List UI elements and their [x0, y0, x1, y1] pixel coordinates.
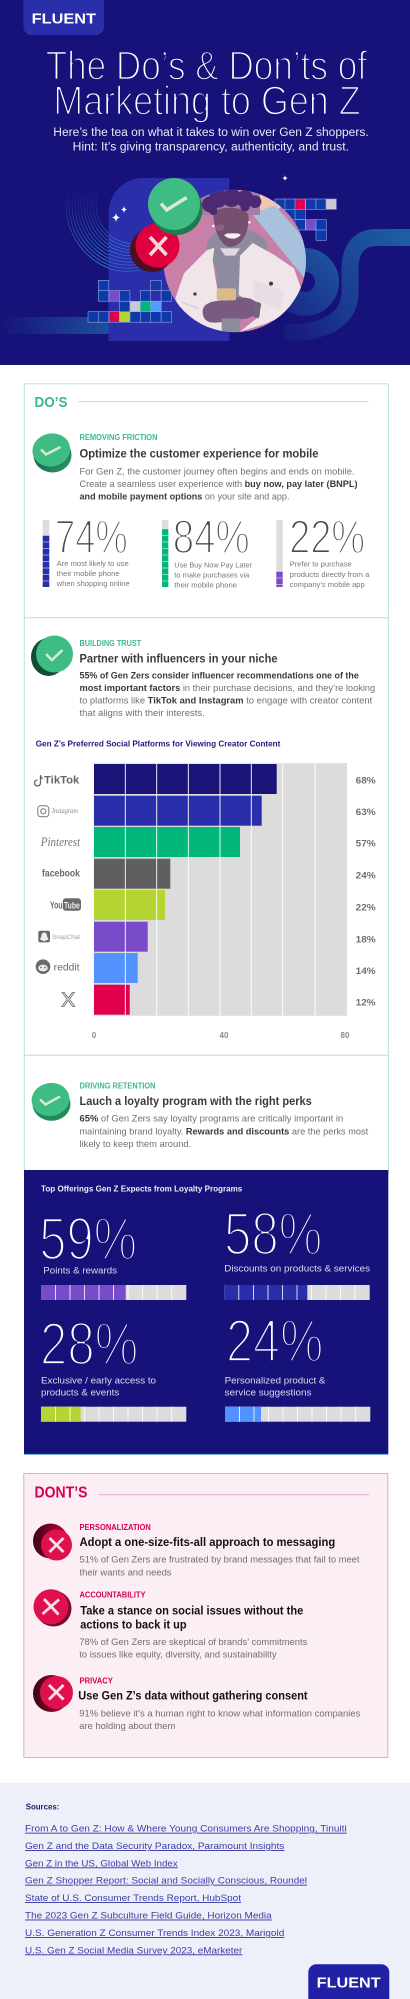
- logo: YouTube: You: [50, 900, 62, 912]
- panel: sources: [0, 1783, 410, 1999]
- item: building trust: Partner with influencers in your niche: [80, 654, 278, 666]
- item: removing friction: Optimize the customer experience for mobile: [80, 449, 318, 461]
- logo: YouTube: Tube: [64, 900, 80, 910]
- stat: 28% exclusive access: products & events: [41, 1387, 120, 1398]
- header background: [0, 0, 410, 365]
- logo: X: X: [61, 990, 75, 1012]
- item: accountability: to issues like equity, diversity, and sustainability: [79, 1649, 277, 1660]
- sources heading: Sources:: [26, 1801, 60, 1811]
- phone: [217, 288, 236, 300]
- stat: 84%: to make purchases via: [174, 571, 250, 580]
- item: driving retention: Lauch a loyalty program with the right perks: [80, 1096, 312, 1108]
- item: driving retention: [29, 1080, 369, 1150]
- hands: [203, 298, 257, 323]
- source links: From A to Gen Z: How & Where Young Consumers Are Shopping, Tinuiti: [25, 1824, 347, 1835]
- jacket right: [239, 243, 301, 332]
- stat: 22%: 22%: [289, 510, 365, 563]
- item: building trust: [31, 636, 375, 719]
- title: [46, 42, 368, 124]
- stat: 28% exclusive access: [40, 1310, 186, 1422]
- value labels: 63%: [356, 807, 376, 818]
- photo: person with phone: [160, 185, 310, 335]
- source links: U.S. Gen Z Social Media Survey 2023, eMarketer: [25, 1945, 242, 1956]
- icon: red cross button: [130, 224, 180, 272]
- face: [213, 208, 249, 247]
- axis labels: 80: [341, 1031, 350, 1040]
- heading: do's: DO’S: [34, 394, 68, 411]
- logo: Fluent top: FLUENT: [32, 11, 96, 28]
- logo: TikTok: TikTok: [44, 774, 80, 786]
- sparkles: [112, 175, 288, 222]
- item: privacy: PRIVACY: [80, 1677, 113, 1686]
- value labels: 68%: [356, 775, 376, 786]
- logo: Snapchat: SnapChat: [52, 934, 80, 941]
- item: privacy: Use Gen Z’s data without gathering consent: [78, 1691, 308, 1703]
- item: privacy: [33, 1675, 361, 1732]
- item: removing friction: [29, 430, 357, 502]
- stat: 84%: 84%: [173, 510, 250, 563]
- arcs over panel: [108, 234, 140, 271]
- panel: top loyalty offerings: [24, 1170, 388, 1454]
- icon: red cross: [33, 1675, 73, 1712]
- logo: Reddit: [36, 959, 80, 974]
- source links: Gen Z and the Data Security Paradox, Paramount Insights: [25, 1841, 285, 1852]
- axis labels: [92, 1031, 350, 1040]
- stat: 58% discounts: Discounts on products & services: [224, 1263, 370, 1274]
- item: building trust: BUILDING TRUST: [80, 639, 141, 648]
- icon: green check: [31, 636, 73, 676]
- stat: 22%: [276, 510, 370, 589]
- title: The Do’s & Don’ts of: [46, 42, 368, 88]
- source links: [25, 1824, 347, 1956]
- item: accountability: Take a stance on social issues without the: [80, 1605, 303, 1617]
- stat: 59% points and rewards: 59%: [39, 1206, 137, 1272]
- item: removing friction: Create a seamless user experience with buy now, pay later (BNPL): [80, 479, 358, 490]
- chart: preferred social platforms: [34, 739, 376, 1040]
- item: accountability: actions to back it up: [80, 1620, 187, 1632]
- logo: Fluent bottom: [308, 1964, 389, 1999]
- item: personalization: PERSONALIZATION: [80, 1523, 151, 1532]
- source links: U.S. Generation Z Consumer Trends Index 2023, Marigold: [25, 1928, 284, 1939]
- stat: 24% personalized suggestions: service suggestions: [225, 1387, 312, 1398]
- item: accountability: ACCOUNTABILITY: [80, 1591, 146, 1600]
- blue panel: [108, 178, 229, 341]
- concentric arcs: [66, 137, 134, 273]
- stat: 84%: Use Buy Now Pay Later: [174, 561, 252, 570]
- value labels: 18%: [356, 934, 376, 945]
- icon: red cross: [34, 1589, 72, 1626]
- stat: 84%: [162, 510, 252, 590]
- icon: green check: [29, 430, 73, 472]
- stat: 59% points and rewards: Points & rewards: [43, 1265, 117, 1276]
- plot background: [94, 764, 347, 1016]
- logo: Fluent top: [24, 0, 104, 35]
- stat: 28% exclusive access: Exclusive / early access to: [41, 1375, 156, 1386]
- subtitle: Hint: It’s giving transparency, authenticity, and trust.: [73, 142, 349, 154]
- stat: 22%: Prefer to purchase: [290, 560, 352, 569]
- item: driving retention: maintaining brand loyalty. Rewards and discounts are the perks most: [80, 1126, 369, 1137]
- logo: YouTube: [50, 898, 81, 912]
- value labels: 24%: [356, 871, 376, 882]
- value labels: 14%: [356, 966, 376, 977]
- hair: [202, 188, 261, 215]
- chart title: Gen Z’s Preferred Social Platforms for Viewing Creator Content: [36, 739, 281, 749]
- hood: [207, 228, 267, 272]
- panel: do's: [24, 384, 388, 1174]
- axis labels: 40: [220, 1031, 229, 1040]
- item: privacy: 91% believe it’s a human right to know what information companies: [79, 1708, 361, 1719]
- panel heading: Top Offerings Gen Z Expects from Loyalty Programs: [41, 1183, 243, 1193]
- stat: 24% personalized suggestions: 24%: [226, 1308, 323, 1374]
- item: building trust: most important factors in their purchase decisions, and they’re looking: [80, 683, 375, 694]
- icon: green check: [29, 1080, 72, 1121]
- source links: Gen Z Shopper Report: Social and Socially Conscious, Roundel: [25, 1876, 307, 1887]
- logo: Fluent bottom: FLUENT: [317, 1975, 381, 1992]
- source links: Gen Z in the US, Global Web Index: [25, 1858, 178, 1869]
- bars: [94, 764, 277, 1015]
- stat: 74%: their mobile phone: [57, 569, 120, 578]
- ring behind the photo: [283, 260, 327, 304]
- item: driving retention: 65% of Gen Zers say loyalty programs are critically important in: [80, 1114, 343, 1125]
- stat: 24% personalized suggestions: [225, 1308, 370, 1422]
- stat: 59% points and rewards: [39, 1206, 186, 1300]
- item: personalization: their wants and needs: [80, 1567, 172, 1578]
- item: accountability: 78% of Gen Zers are skeptical of brands’ commitments: [79, 1637, 308, 1648]
- item: personalization: Adopt a one-size-fits-all approach to messaging: [80, 1537, 335, 1549]
- item: personalization: [33, 1523, 360, 1578]
- panel: don'ts: [24, 1474, 388, 1758]
- pixel grid: top right: [275, 199, 336, 240]
- item: removing friction: REMOVING FRICTION: [80, 433, 158, 442]
- stat: 28% exclusive access: 28%: [40, 1310, 138, 1378]
- item: privacy: are holding about them: [79, 1721, 175, 1732]
- left gradient band: [0, 317, 109, 334]
- value labels: 22%: [356, 903, 376, 914]
- stat: 24% personalized suggestions: Personalized product &: [225, 1375, 326, 1386]
- item: removing friction: and mobile payment options on your site and app.: [80, 492, 290, 502]
- item: driving retention: likely to keep them around.: [80, 1139, 191, 1150]
- jacket left: [175, 248, 224, 332]
- value labels: 57%: [356, 839, 376, 850]
- subtitle: [53, 127, 369, 154]
- heading: don'ts: DONT’S: [34, 1484, 88, 1501]
- item: building trust: 55% of Gen Zers consider influencer recommendations one of the: [80, 670, 359, 681]
- pixel grid: bottom left: [88, 280, 172, 322]
- stat: 74%: 74%: [55, 510, 128, 563]
- source links: State of U.S. Consumer Trends Report, HubSpot: [25, 1893, 241, 1904]
- logo: Reddit: reddit: [54, 963, 80, 974]
- icon: red cross: [33, 1524, 72, 1560]
- item: accountability: [34, 1589, 308, 1660]
- subtitle: Here’s the tea on what it takes to win over Gen Z shoppers.: [53, 127, 369, 139]
- stat: 58% discounts: 58%: [224, 1200, 322, 1268]
- axis labels: 0: [92, 1031, 97, 1040]
- item: building trust: to platforms like TikTok and Instagram to engage with creator content: [80, 696, 373, 707]
- stat: 74%: Are most likely to use: [57, 559, 129, 568]
- title: Marketing to Gen Z: [53, 78, 361, 124]
- item: removing friction: For Gen Z, the customer journey often begins and ends on mobile.: [80, 466, 354, 477]
- hero illustration: [14, 175, 410, 341]
- stat: 84%: their mobile phone: [174, 581, 237, 590]
- source links: The 2023 Gen Z Subculture Field Guide, Horizon Media: [25, 1910, 272, 1922]
- logo: Instagram: Instagram: [51, 807, 78, 815]
- value labels: 12%: [356, 998, 376, 1009]
- value labels: [356, 775, 376, 1009]
- stat: 58% discounts: [224, 1200, 370, 1300]
- logo: Facebook: facebook: [42, 868, 80, 880]
- flowing ribbon: [284, 238, 410, 333]
- item: personalization: 51% of Gen Zers are frustrated by brand messages that fail to meet: [80, 1555, 360, 1566]
- stat: 74%: when shopping online: [56, 579, 130, 588]
- logo: Instagram: [38, 806, 78, 817]
- hoodie front: [216, 270, 241, 332]
- logo: Snapchat: [38, 931, 80, 942]
- item: driving retention: DRIVING RETENTION: [80, 1081, 156, 1090]
- logo: Pinterest: Pinterest: [40, 835, 81, 849]
- icon: green check button: [148, 178, 202, 235]
- stat: 22%: company’s mobile app: [290, 580, 365, 589]
- item: building trust: that aligns with their interests.: [80, 708, 205, 719]
- stat: 22%: products directly from a: [290, 570, 370, 579]
- grid lines: [125, 764, 315, 1016]
- stat: 74%: [43, 510, 130, 588]
